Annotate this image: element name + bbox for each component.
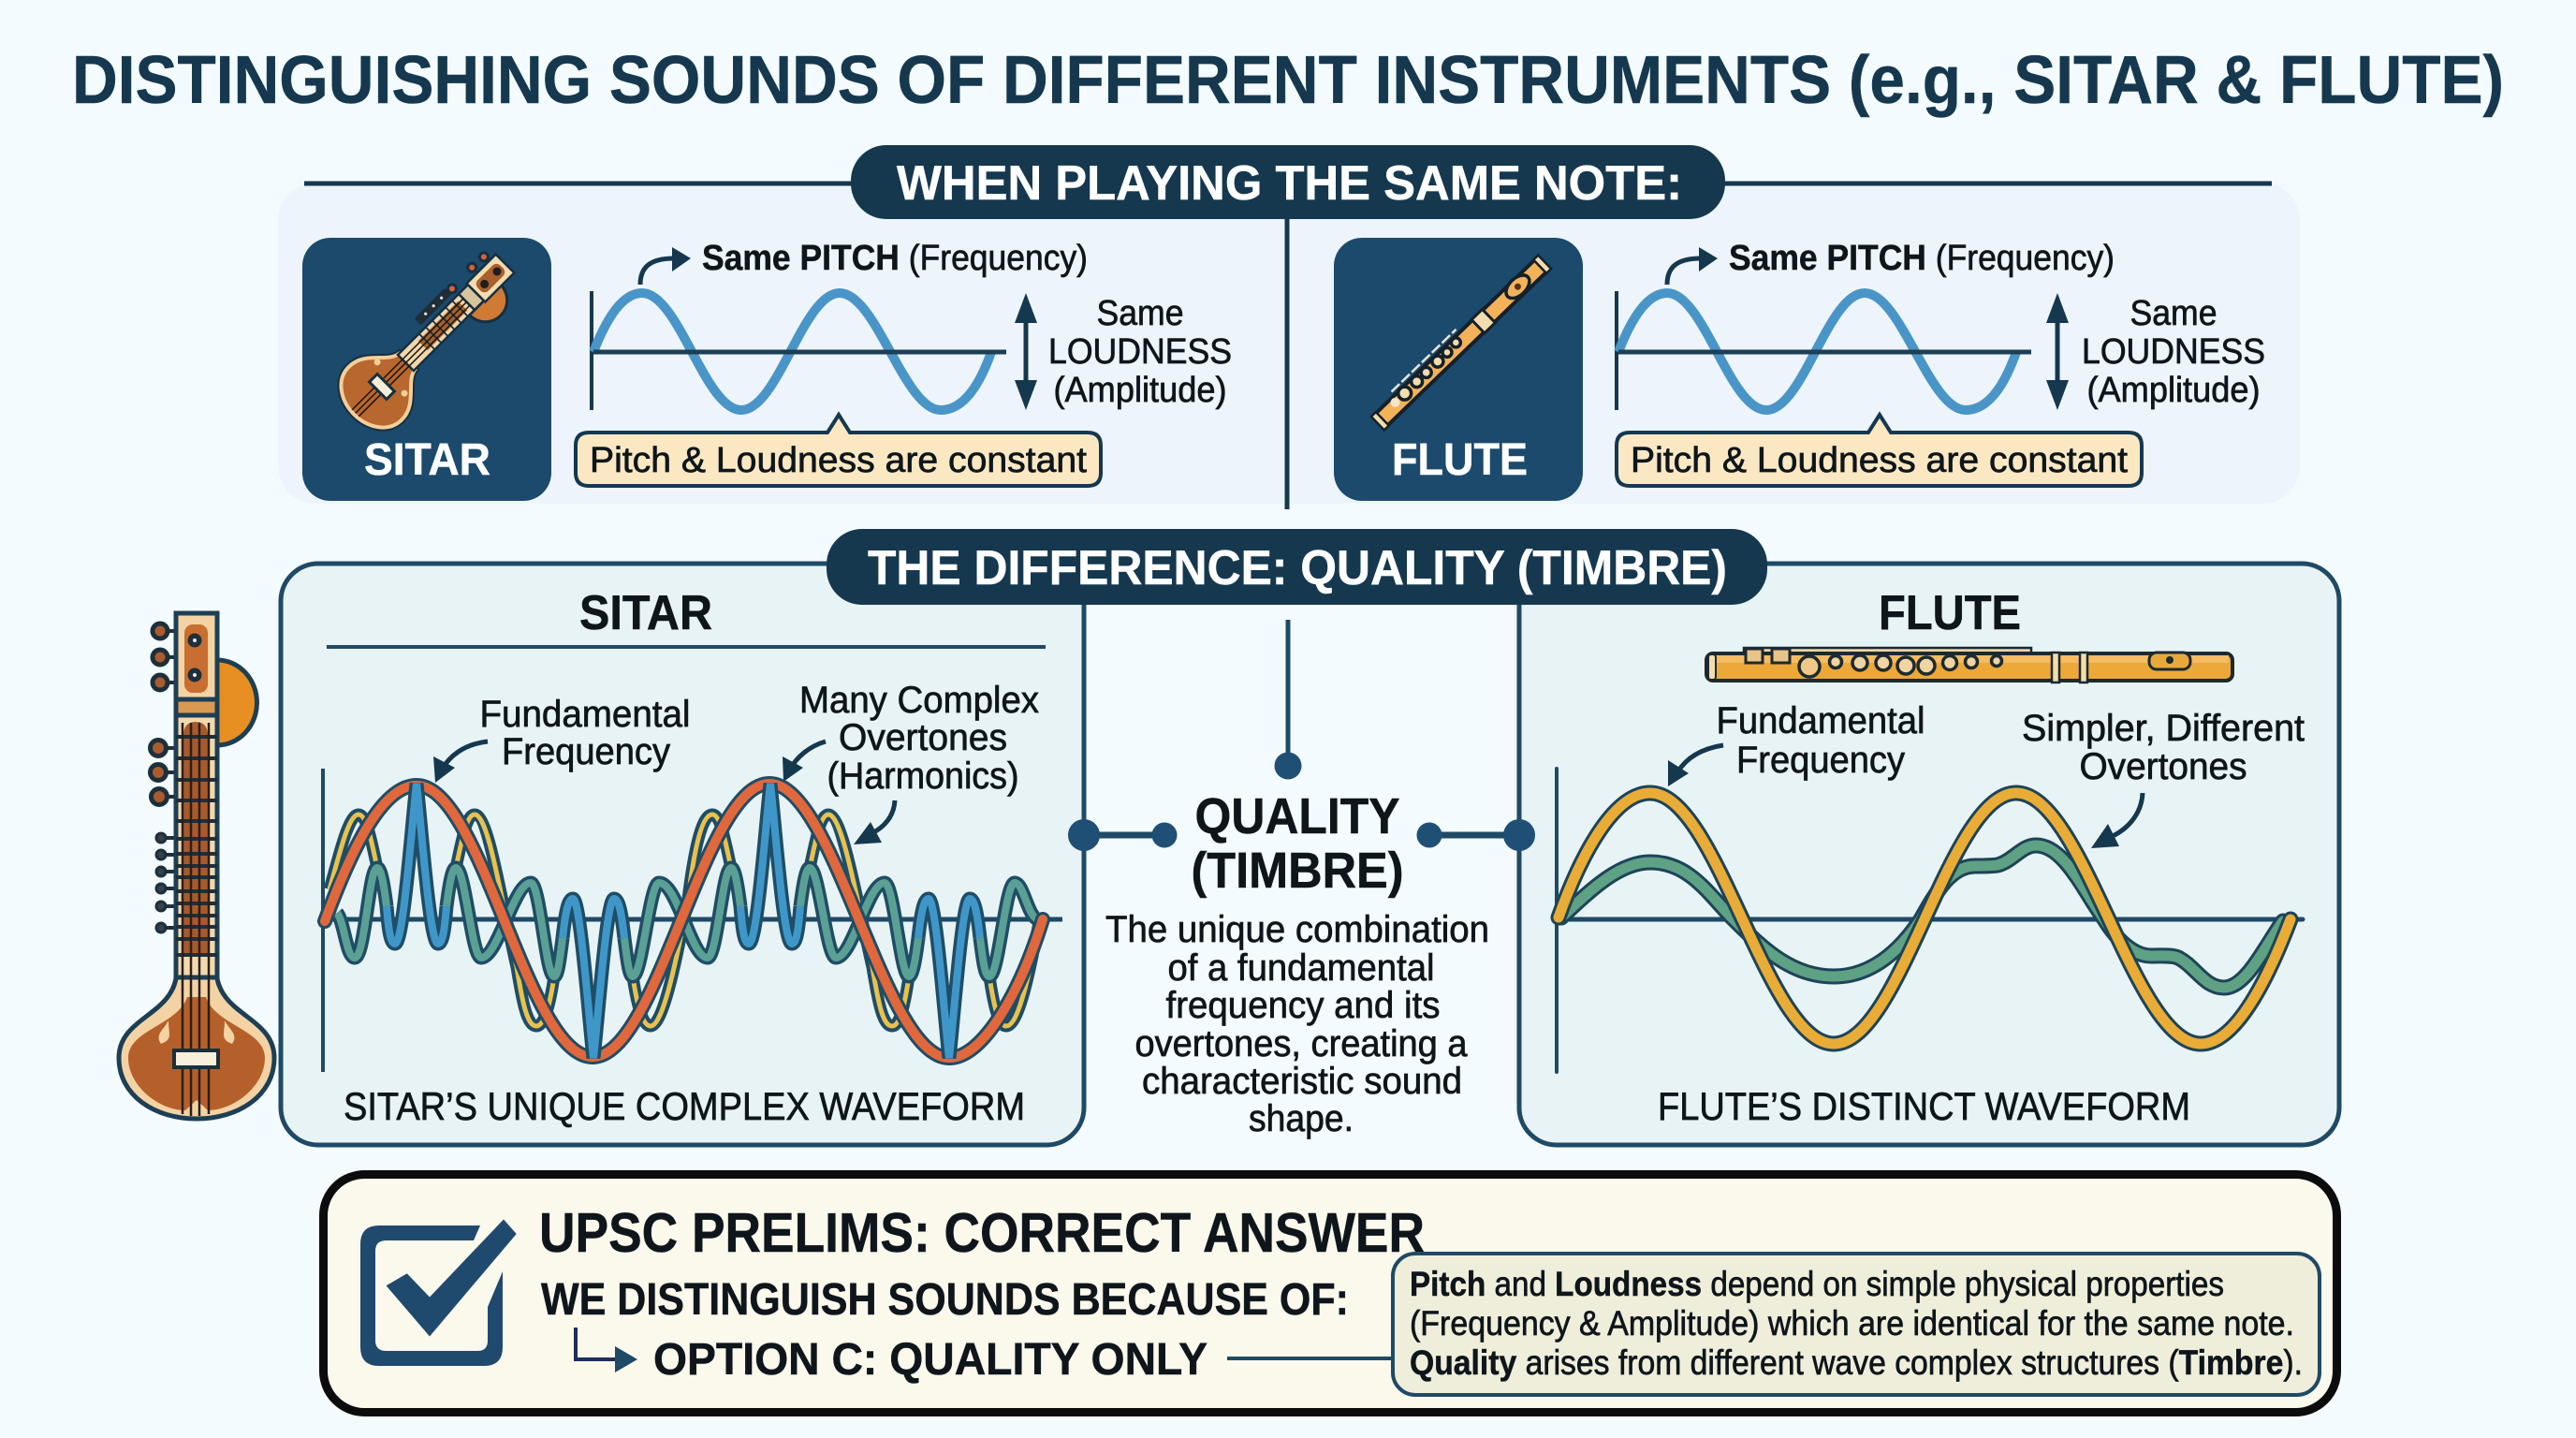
label: same loudness, flute: (Amplitude) [2087, 371, 2260, 410]
callout: explanation [1393, 1254, 2320, 1395]
heading: upsc prelims: UPSC PRELIMS: CORRECT ANSWER [539, 1202, 1425, 1264]
text block: quality timbre: The unique combination [1105, 909, 1489, 950]
label: same loudness, sitar [1048, 294, 1232, 410]
tile: sitar [302, 237, 551, 501]
label: overtones, flute: Overtones [2080, 746, 2247, 787]
callout: constant, flute: Pitch & Loudness are constant [1631, 441, 2128, 480]
icon: horizontal flute [1706, 648, 2232, 682]
arrow: amplitude, flute [2046, 293, 2069, 410]
text: we distinguish sounds: WE DISTINGUISH SOUNDS BECAUSE OF: [541, 1275, 1349, 1325]
arrow: pitch, flute [1667, 247, 1718, 285]
label: same loudness, flute: Same [2130, 294, 2217, 333]
callout: constant, flute [1617, 415, 2142, 486]
chart: flute sine wave [1617, 291, 2031, 410]
label: same loudness, sitar: Same [1097, 294, 1183, 333]
caption: sitar waveform: SITAR’S UNIQUE COMPLEX WAVEFORM [344, 1084, 1025, 1128]
label: fundamental frequency, sitar [479, 694, 691, 772]
arrow: fundamental, flute [1668, 745, 1723, 786]
label: fundamental frequency, sitar: Fundamental [479, 694, 691, 735]
wave: blue harmonic [387, 784, 980, 1058]
label: overtones, sitar [799, 680, 1039, 797]
text block: quality timbre: characteristic sound [1142, 1061, 1462, 1102]
callout: explanation: (Frequency & Amplitude) which are identical for the same note. [1410, 1304, 2294, 1343]
text block: quality timbre: (TIMBRE) [1191, 843, 1404, 899]
icon: large sitar [119, 613, 274, 1119]
label: same loudness, flute [2082, 294, 2265, 410]
wave: green overtone [1561, 845, 2283, 988]
wave: yellow fundamental [1559, 793, 2291, 1044]
label: sitar: SITAR [364, 435, 490, 485]
arrow: overtones, flute [2091, 793, 2143, 848]
text block: quality timbre [1105, 788, 1489, 1139]
chart: sitar complex waveform [323, 769, 1062, 1072]
wave: yellow harmonic [329, 814, 1039, 1026]
panel: flute waveform [1519, 564, 2339, 1145]
arrow: fundamental, sitar [433, 741, 488, 783]
wave: teal harmonic [337, 868, 1039, 976]
label: same loudness, sitar: LOUDNESS [1048, 332, 1232, 372]
tile: flute [1334, 238, 1583, 501]
icon: checkbox [360, 1218, 518, 1366]
label: fundamental frequency, flute: Fundamental [1717, 700, 1925, 741]
chart: flute waveform [1557, 769, 2303, 1072]
label: same pitch, flute: Same PITCH (Frequency) [1729, 239, 2115, 278]
connectors [1068, 620, 1535, 851]
callout: explanation: Quality arises from different wave complex structures (Timbre). [1410, 1343, 2303, 1382]
callout: constant, sitar [576, 415, 1101, 486]
label: overtones, flute [2022, 708, 2305, 787]
label: fundamental frequency, flute: Frequency [1736, 740, 1905, 781]
arrow: amplitude, sitar [1015, 293, 1037, 410]
icon: flute [1368, 253, 1551, 430]
arrow: to answer [576, 1328, 637, 1372]
label: fundamental frequency, flute [1717, 700, 1925, 781]
label: fundamental frequency, sitar: Frequency [502, 731, 670, 772]
arrows: overtones, sitar [783, 741, 895, 844]
label: overtones, sitar: Many Complex [799, 680, 1039, 721]
caption: flute waveform: FLUTE’S DISTINCT WAVEFORM [1658, 1084, 2190, 1128]
text block: quality timbre: frequency and its [1166, 985, 1440, 1026]
panel: correct answer [324, 1174, 2336, 1412]
label: same pitch, sitar: Same PITCH (Frequency) [702, 239, 1088, 278]
label: same loudness, flute: LOUDNESS [2082, 332, 2265, 372]
heading: when playing the same note: WHEN PLAYING THE SAME NOTE: [897, 156, 1682, 211]
label: same loudness, sitar: (Amplitude) [1054, 371, 1226, 410]
callout: constant, sitar: Pitch & Loudness are constant [590, 441, 1087, 480]
heading: flute: FLUTE [1879, 586, 2021, 640]
label: overtones, sitar: (Harmonics) [827, 756, 1018, 797]
heading: sitar: SITAR [579, 586, 712, 640]
text block: quality timbre: of a fundamental [1168, 947, 1434, 989]
arrow: pitch, sitar [640, 247, 691, 285]
icon: sitar [328, 237, 532, 441]
wave: orange fundamental [325, 784, 1043, 1058]
heading: the difference [827, 529, 1767, 605]
panel: same note [278, 145, 2300, 509]
label: flute: FLUTE [1392, 435, 1528, 485]
label: overtones, flute: Simpler, Different [2022, 708, 2305, 749]
heading: the difference: THE DIFFERENCE: QUALITY (TIMBRE) [868, 541, 1727, 595]
text block: quality timbre: overtones, creating a [1134, 1023, 1468, 1064]
text block: quality timbre: QUALITY [1194, 788, 1400, 844]
chart: sitar sine wave [592, 291, 1006, 410]
text: option c: OPTION C: QUALITY ONLY [653, 1335, 1208, 1385]
callout: explanation: Pitch and Loudness depend on simple physical properties [1410, 1265, 2224, 1303]
panel: sitar waveform [281, 564, 1084, 1145]
label: overtones, sitar: Overtones [839, 717, 1007, 758]
text block: quality timbre: shape. [1249, 1098, 1354, 1139]
heading: when playing the same note [851, 145, 1725, 219]
